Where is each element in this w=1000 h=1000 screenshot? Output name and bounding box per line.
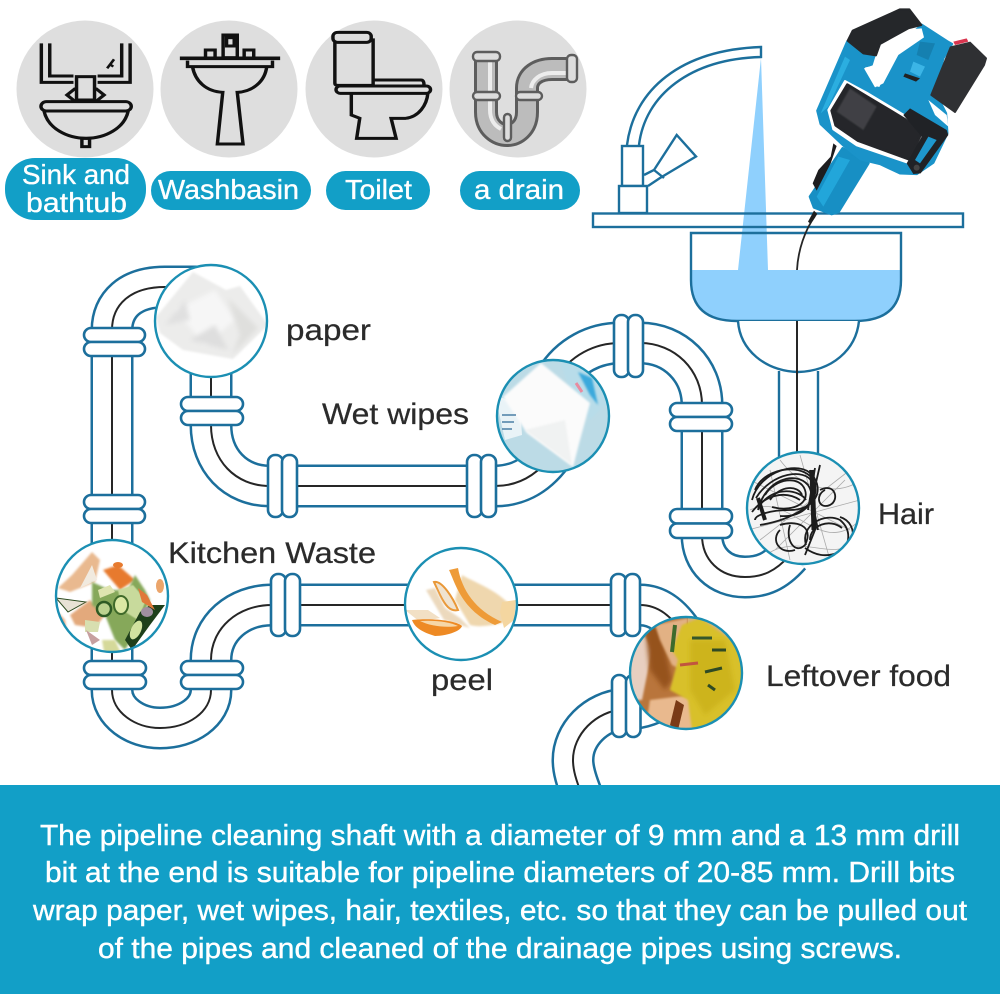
description text: wrap paper, wet wipes, hair, textiles, etc. so that they can be pulled out	[32, 895, 967, 927]
pipe: kitchen waste U bend to peel	[112, 605, 420, 728]
label pill: toilet	[326, 171, 430, 210]
basin outline	[691, 233, 901, 372]
blue body frame	[817, 25, 952, 174]
photo: orange peel	[405, 548, 517, 660]
description text: of the pipes and cleaned of the drainage pipes using screws.	[98, 933, 902, 965]
photo: wet wipes	[495, 360, 610, 472]
label pill: sink and bathtub: Sink and	[22, 159, 130, 190]
label pill: washbasin: Washbasin	[158, 174, 299, 205]
label pill: washbasin	[151, 171, 311, 210]
icon: drain trap	[450, 20, 586, 158]
icon: sink and bathtub	[16, 20, 154, 158]
black grip	[848, 9, 921, 55]
label: leftover food: Leftover food	[766, 660, 951, 693]
black drum	[828, 81, 926, 164]
icon: toilet	[306, 20, 442, 158]
label: peel: peel	[431, 664, 493, 697]
label pill: toilet: Toilet	[345, 174, 412, 205]
description text: The pipeline cleaning shaft with a diameter of 9 mm and a 13 mm drill	[40, 820, 960, 852]
lower handle	[808, 143, 868, 224]
drain cleaner drill	[808, 9, 986, 224]
hand grip opening	[864, 28, 924, 87]
description text: bit at the end is suitable for pipeline diameters of 20-85 mm. Drill bits	[45, 857, 955, 889]
label pill: a drain	[460, 171, 580, 210]
icon: washbasin	[160, 20, 298, 158]
pipe couplings	[84, 315, 732, 737]
pipe: leftover food outlet	[573, 692, 670, 795]
label: wet wipes: Wet wipes	[322, 398, 469, 431]
label pill: a drain: a drain	[474, 174, 564, 205]
pipe: peel to leftover food	[500, 605, 685, 637]
sink counter	[593, 214, 963, 227]
black clamp	[903, 108, 948, 174]
label: kitchen waste: Kitchen Waste	[168, 537, 376, 570]
gap beside battery	[928, 100, 948, 127]
pipe: under basin to hair	[779, 321, 818, 470]
water stream and basin water	[691, 58, 901, 321]
description text	[32, 820, 967, 965]
photo: leftover food	[628, 616, 745, 732]
faucet	[619, 47, 761, 213]
battery pack	[931, 38, 986, 112]
bottom description panel	[0, 785, 1000, 994]
photo: crumpled paper	[155, 265, 268, 377]
label: hair: Hair	[878, 498, 934, 531]
label pill: sink and bathtub	[5, 158, 146, 220]
photo: hair	[747, 452, 860, 564]
pipe: hair to wet wipes run	[555, 343, 790, 577]
photo: kitchen waste	[56, 540, 168, 658]
label pill: sink and bathtub: bathtub	[26, 187, 127, 218]
drill wire	[797, 216, 815, 270]
label: paper: paper	[286, 314, 371, 347]
pipe: paper to kitchen waste	[112, 287, 205, 560]
pipe: wet wipes to paper	[211, 365, 552, 486]
